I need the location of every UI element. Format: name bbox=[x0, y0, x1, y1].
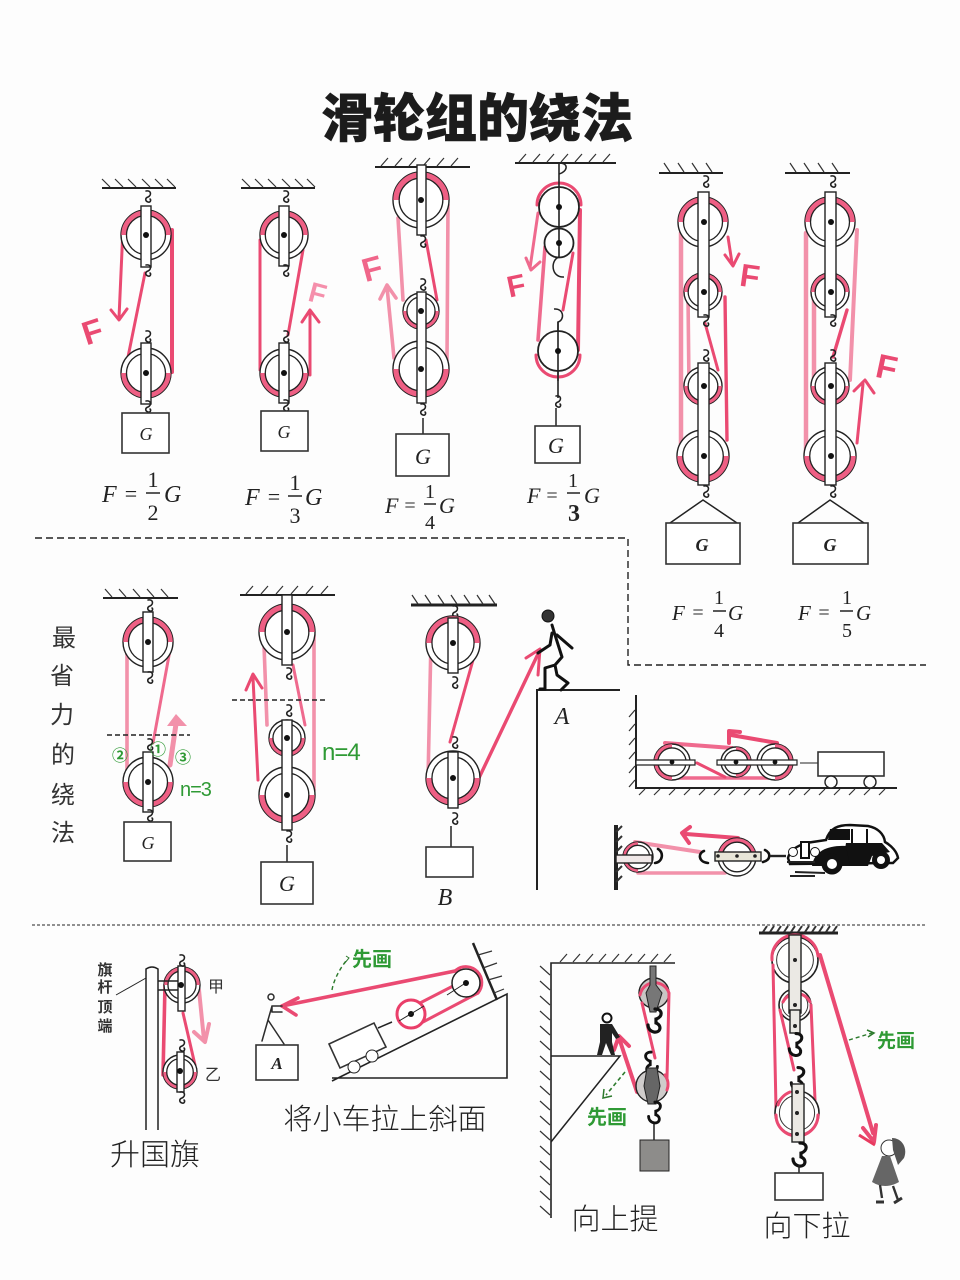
diagram: pulling downward: 先画 bbox=[877, 1030, 915, 1052]
diagram: least-force n=3: G bbox=[142, 833, 154, 853]
formula: F = 1/3 G (top row, fourth): F bbox=[526, 483, 541, 508]
diagram: F = 1/3 G with three open pulleys: G bbox=[548, 433, 564, 458]
formula: F = 1/4 G (top row, third): = bbox=[404, 495, 416, 517]
divider: lower dashed line bbox=[32, 924, 926, 926]
diagram: person A pulling weight B: A bbox=[553, 704, 570, 730]
title: 滑轮组的绕法 bbox=[321, 77, 633, 152]
diagram: F = 1/3 G bbox=[241, 179, 330, 451]
diagram: lifting upward bbox=[540, 954, 675, 1218]
diagram: raising the flag: 旗 bbox=[97, 961, 113, 979]
icon: girl pulling rope bbox=[872, 1138, 905, 1203]
formula: F = 1/5 G: F bbox=[797, 601, 811, 625]
formula: F = 1/5 G: = bbox=[818, 602, 830, 624]
formula: F = 1/4 G (top row, third): G bbox=[439, 493, 455, 518]
diagram: least-force n=4 bbox=[232, 586, 360, 904]
formula: F = 1/3 G (top row, fourth): 1 bbox=[568, 470, 578, 492]
formula: F = 1/3 G: = bbox=[268, 484, 280, 509]
diagram: least-force n=3: ③ bbox=[175, 749, 191, 767]
diagram: F = 1/4 G four pulleys bbox=[659, 163, 762, 564]
formula: F = 1/3 G: 1 bbox=[290, 470, 300, 495]
formula: F = 1/3 G: 3 bbox=[290, 503, 300, 528]
formula: F = 1/4 G (right): 4 bbox=[714, 620, 724, 642]
formula: F = 1/3 G: F bbox=[244, 485, 260, 511]
diagram: pulley pulling car bbox=[616, 825, 898, 890]
formula: F = 1/4 G (right): 1 bbox=[714, 587, 724, 609]
diagram: F = 1/5 G four pulleys bbox=[785, 163, 901, 564]
formula: F = 1/2 G: G bbox=[164, 482, 181, 508]
diagram: pulling cart up the slope: 先画 bbox=[352, 948, 392, 971]
diagram: F = 1/4 G bbox=[358, 158, 470, 476]
diagram: least-force n=3: ② bbox=[112, 747, 128, 765]
diagram: F = 1/2 G bbox=[77, 179, 176, 453]
formula: F = 1/2 G: 2 bbox=[148, 500, 158, 525]
diagram: raising the flag: 杆 bbox=[97, 978, 113, 996]
caption: pull downward: 向下拉 bbox=[763, 1210, 851, 1243]
formula: F = 1/2 G bbox=[101, 467, 181, 525]
diagram: least-force n=3: n=3 bbox=[180, 779, 212, 801]
diagram: F = 1/5 G four pulleys: F bbox=[872, 347, 901, 389]
vertical label: most force-saving method: 的 bbox=[51, 742, 75, 769]
vertical label: most force-saving method: 法 bbox=[51, 820, 75, 847]
caption: raising the flag: 升国旗 bbox=[110, 1139, 200, 1172]
diagram: F = 1/4 G: F bbox=[358, 248, 387, 289]
formula: F = 1/4 G (top row, third) bbox=[384, 481, 455, 534]
diagram: least-force n=3 bbox=[103, 589, 212, 861]
divider: upper dashed border bbox=[35, 538, 926, 665]
vertical label: most force-saving method: 最 bbox=[52, 625, 76, 652]
formula: F = 1/4 G (top row, third): 4 bbox=[425, 512, 435, 534]
diagram: raising the flag: 端 bbox=[97, 1018, 113, 1035]
formula: F = 1/4 G (top row, third): 1 bbox=[425, 481, 435, 503]
icon: vintage car bbox=[787, 825, 898, 876]
diagram: person A pulling weight B: B bbox=[438, 885, 453, 911]
formula: F = 1/4 G (right): G bbox=[728, 601, 743, 625]
formula: F = 1/4 G (right): F bbox=[671, 601, 685, 625]
diagram: person A pulling weight B bbox=[411, 595, 620, 911]
icon: silhouette person bbox=[597, 1014, 620, 1055]
vertical label: most force-saving method: 省 bbox=[50, 663, 74, 690]
diagram: pulling cart up the slope: A bbox=[270, 1054, 283, 1073]
formula: F = 1/3 G: G bbox=[305, 485, 322, 511]
formula: F = 1/3 G (top row, fourth): G bbox=[584, 483, 600, 508]
diagram: raising the flag: 甲 bbox=[208, 979, 224, 996]
diagram: raising the flag bbox=[97, 955, 224, 1130]
formula: F = 1/3 G (top row, fourth) bbox=[526, 470, 600, 527]
formula: F = 1/5 G: 1 bbox=[842, 587, 852, 609]
vertical label: most force-saving method bbox=[50, 625, 76, 847]
vertical label: most force-saving method: 力 bbox=[50, 702, 74, 729]
formula: F = 1/2 G: 1 bbox=[148, 467, 158, 492]
vertical label: most force-saving method: 绕 bbox=[51, 782, 75, 809]
diagram: least-force n=4: G bbox=[279, 871, 295, 896]
diagram: F = 1/2 G: G bbox=[140, 424, 152, 444]
diagram: horizontal pulley pulling cart bbox=[629, 695, 897, 795]
formula: F = 1/5 G: 5 bbox=[842, 620, 852, 642]
diagram: raising the flag: 乙 bbox=[205, 1067, 221, 1084]
diagram: lifting upward: 先画 bbox=[587, 1106, 627, 1129]
diagram: F = 1/2 G: F bbox=[77, 311, 108, 352]
diagram: pulling downward bbox=[759, 926, 915, 1203]
diagram: F = 1/3 G: F bbox=[305, 276, 330, 311]
diagram: least-force n=4: n=4 bbox=[322, 739, 360, 766]
formula: F = 1/5 G: G bbox=[856, 601, 871, 625]
formula: F = 1/5 G bbox=[797, 587, 871, 642]
diagram: F = 1/3 G with three open pulleys bbox=[504, 154, 616, 463]
caption: pull cart up slope: 将小车拉上斜面 bbox=[283, 1103, 487, 1136]
diagram: F = 1/3 G: G bbox=[278, 422, 290, 442]
diagram: F = 1/4 G four pulleys: F bbox=[738, 257, 762, 295]
formula: F = 1/2 G: F bbox=[101, 482, 117, 508]
caption: lift upward: 向上提 bbox=[571, 1203, 659, 1236]
diagram: least-force n=3: ① bbox=[150, 741, 166, 759]
diagram: F = 1/5 G four pulleys: G bbox=[824, 535, 836, 555]
icon: stick figure A bbox=[538, 610, 572, 690]
formula: F = 1/4 G (right): = bbox=[692, 602, 704, 624]
formula: F = 1/3 G bbox=[244, 470, 322, 528]
diagram: F = 1/4 G four pulleys: G bbox=[696, 535, 708, 555]
formula: F = 1/4 G (right) bbox=[671, 587, 743, 642]
diagram: pulling cart up the slope bbox=[256, 943, 507, 1081]
formula: F = 1/2 G: = bbox=[125, 481, 137, 506]
diagram: F = 1/4 G: G bbox=[415, 444, 431, 469]
formula: F = 1/4 G (top row, third): F bbox=[384, 493, 399, 518]
diagram: F = 1/3 G with three open pulleys: F bbox=[504, 268, 529, 305]
formula: F = 1/3 G (top row, fourth): = bbox=[546, 485, 558, 507]
diagram: raising the flag: 顶 bbox=[97, 999, 113, 1016]
formula: F = 1/3 G (top row, fourth): 3 bbox=[568, 501, 580, 527]
